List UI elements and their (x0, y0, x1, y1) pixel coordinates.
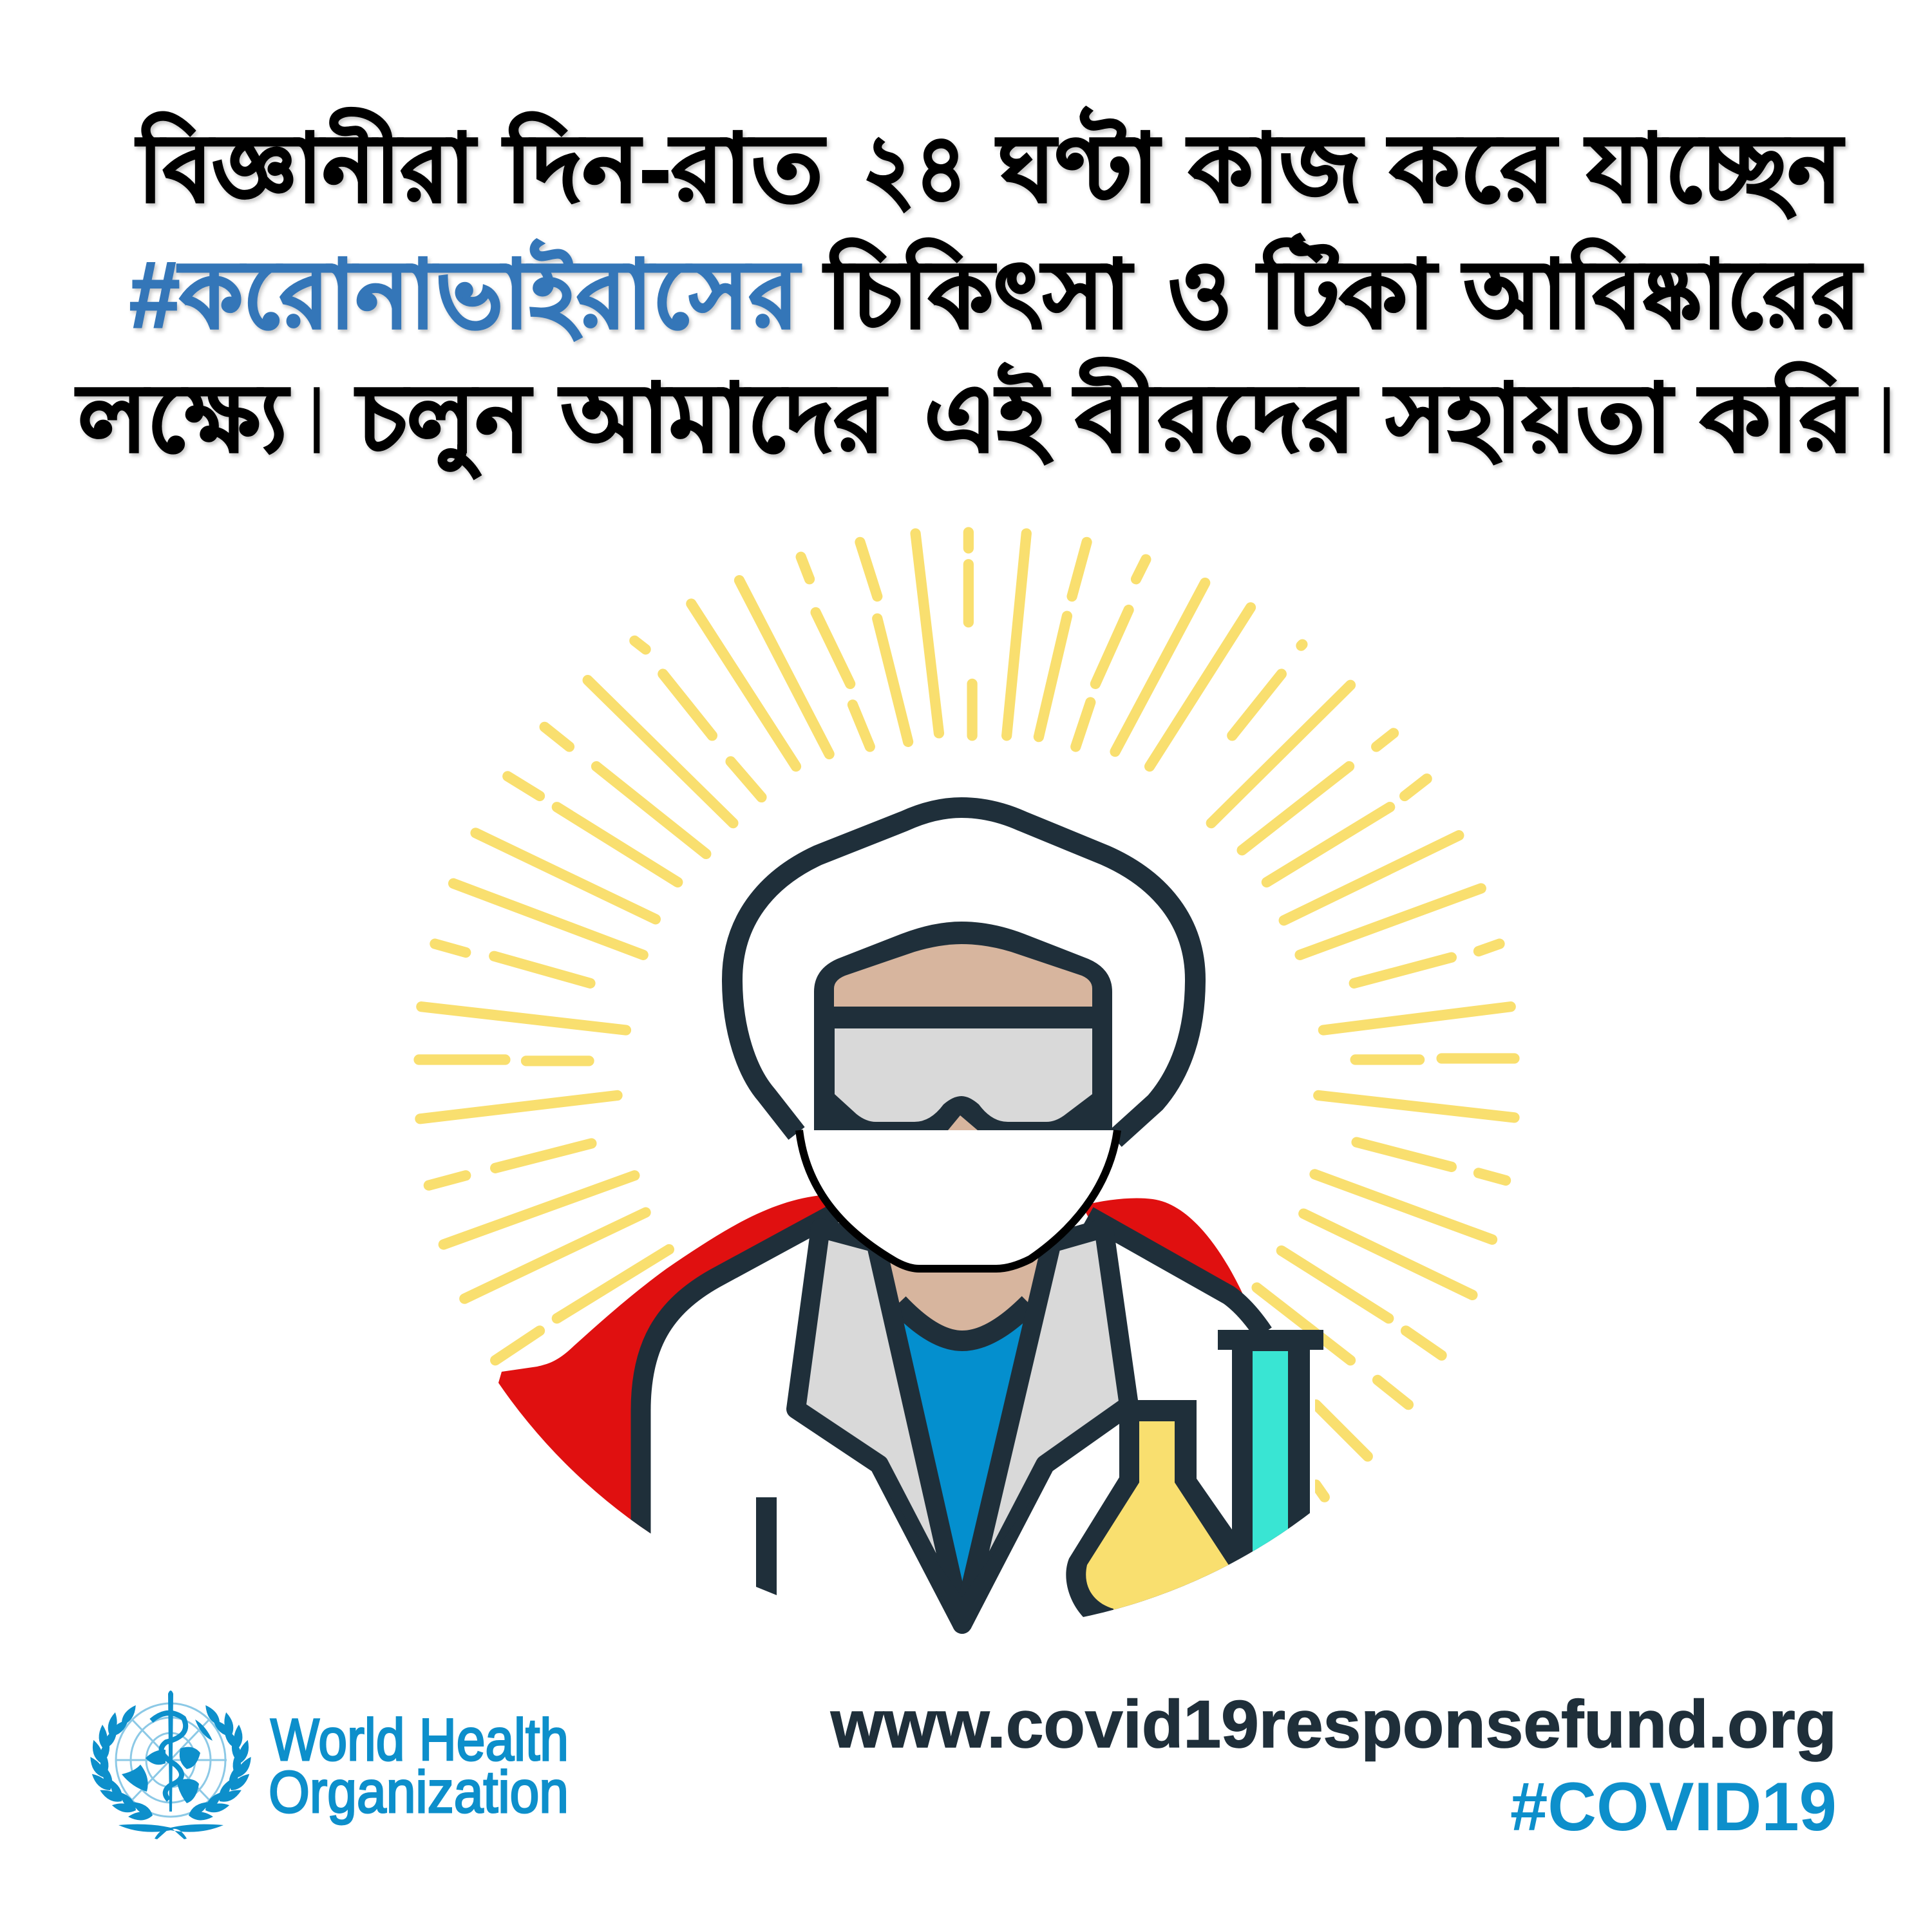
WHO name: World Health (270, 1707, 569, 1773)
ray mask (1309, 1350, 1315, 1543)
flask liquid (1086, 1421, 1229, 1610)
coat body (644, 1298, 703, 1533)
lapel tip (970, 1571, 1001, 1629)
title line 2: টিকা (1256, 234, 1439, 347)
title line 2: ও (1168, 242, 1232, 347)
title line 3: করি (1697, 361, 1858, 471)
coat pocket (756, 1497, 777, 1595)
blue shirt (889, 1314, 1037, 1616)
test tube liquid (1253, 1351, 1288, 1552)
WHO logo (87, 1690, 569, 1839)
title line 1: ঘণ্টা (995, 107, 1162, 221)
title line 3: বীরদের (1072, 357, 1359, 471)
title line 3: আমাদের (558, 366, 888, 471)
title line 1: দিন-রাত (502, 111, 826, 221)
title line 2: আবিষ্কারের (1461, 238, 1863, 347)
neckline (898, 1303, 1029, 1341)
title line 2 (129, 234, 1863, 347)
nose (948, 1115, 978, 1130)
title line 3: । (305, 366, 323, 471)
cape (451, 1195, 1244, 1546)
website url: www.covid19responsefund.org (830, 1687, 1837, 1762)
hood (732, 808, 1195, 1139)
title (75, 107, 1893, 479)
neck (882, 1243, 1046, 1341)
globe (116, 1703, 227, 1817)
WHO emblem (87, 1690, 254, 1839)
continents (122, 1719, 213, 1803)
face frame (814, 922, 1112, 1133)
coat shoulder outline (641, 1213, 1264, 1546)
staff and snake (168, 1690, 173, 1812)
title line 3: সহায়তা (1383, 366, 1675, 471)
title line 3: লক্ষ্যে (75, 366, 290, 471)
ribbon (118, 1824, 223, 1839)
title line 3: । (1875, 366, 1893, 471)
goggles (835, 1028, 1092, 1122)
WHO name: Organization (269, 1759, 569, 1825)
face mask outline (799, 1130, 1117, 1269)
forehead (834, 944, 1092, 1007)
title line 2: #করোনাভাইরাসের (129, 239, 802, 347)
scientist figure (451, 808, 1323, 1674)
right lapel (962, 1228, 1129, 1624)
left wreath (87, 1703, 155, 1821)
title line 3: এই (924, 363, 1053, 471)
title line 1: বিজ্ঞানীরা (135, 108, 477, 221)
title line 1: কাজ (1186, 116, 1364, 221)
snake (151, 1713, 185, 1800)
sunburst rays (419, 533, 1514, 1497)
left lapel (796, 1228, 962, 1624)
title line 1 (135, 107, 1845, 221)
title line 1: করে (1387, 116, 1558, 221)
hashtag: #COVID19 (1510, 1768, 1837, 1845)
title line 1: ২৪ (862, 116, 967, 221)
title line 1: যাচ্ছেন (1584, 116, 1845, 221)
title line 2: চিকিৎসা (822, 238, 1134, 347)
flask outline (1066, 1400, 1232, 1617)
title line 3: চলুন (354, 366, 533, 479)
title line 3 (75, 357, 1893, 479)
right wreath (186, 1703, 254, 1821)
face mask (799, 1130, 1117, 1269)
test tube (1218, 1330, 1323, 1563)
